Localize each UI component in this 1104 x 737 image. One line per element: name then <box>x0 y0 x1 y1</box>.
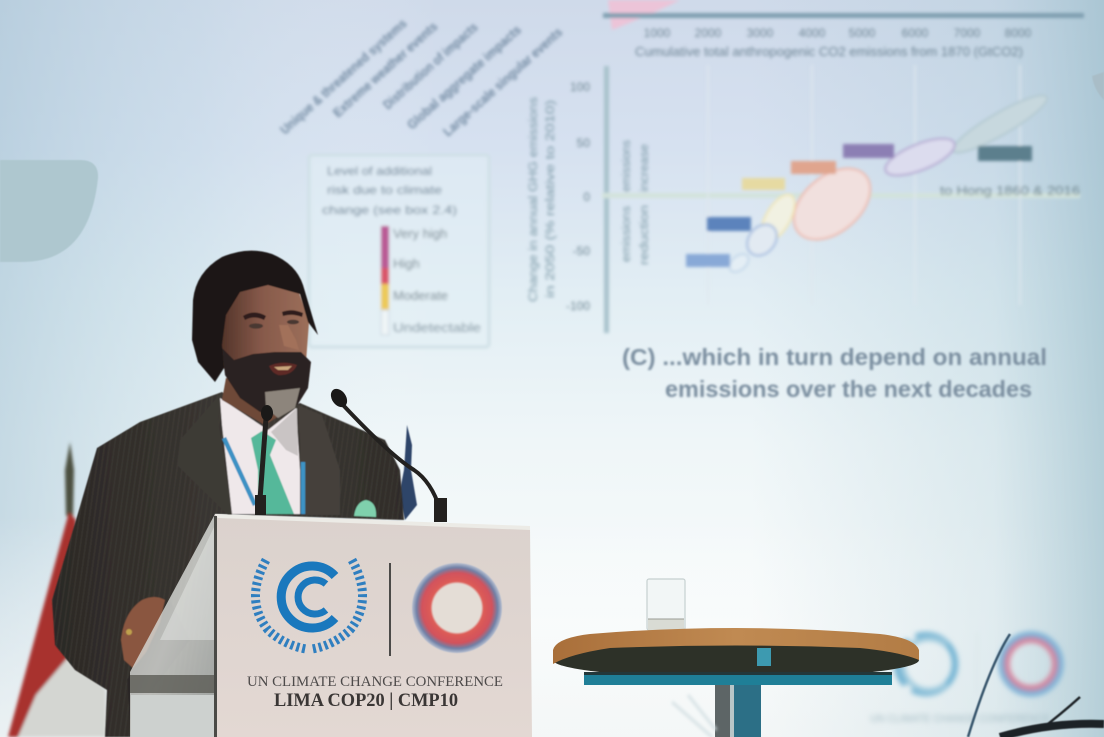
podium <box>130 514 532 737</box>
lanyard <box>224 438 303 514</box>
mouth <box>269 363 297 375</box>
slide chart C: emissions scatter: 100 <box>570 80 590 94</box>
UNFCCC logo <box>255 560 363 649</box>
nose <box>279 325 299 350</box>
slide: risk legend box: Moderate <box>393 288 448 303</box>
COP20 ring logo <box>412 563 502 653</box>
podium text: LIMA COP20 | CMP10 <box>274 690 458 711</box>
slide chart C: emissions scatter: Change in annual GHG emissions <box>528 97 540 302</box>
podium text: UN CLIMATE CHANGE CONFERENCE <box>247 674 503 690</box>
flag: Peru behind speaker <box>8 442 106 737</box>
bracket <box>584 672 892 685</box>
slide panel corner at left <box>0 160 98 262</box>
slide: risk legend box: risk due to climate <box>327 183 442 197</box>
drinking glass <box>647 579 685 630</box>
podium front <box>215 514 532 737</box>
slide chart A: top axis with captions: 3000 <box>747 26 774 40</box>
slide chart A: top axis with captions: 2000 <box>695 26 722 40</box>
slide: risk legend box: Level of additional <box>327 164 432 178</box>
speaker: Rajendra Pachauri <box>52 251 404 737</box>
blurred table-base shadow streaks <box>672 695 716 737</box>
slide: diagonal column labels: Large-scale singular events <box>440 24 565 139</box>
slide caption text: emissions over the next decades <box>665 376 1032 402</box>
slide: risk legend box: change (see box 2.4) <box>322 203 457 217</box>
slide: diagonal column labels: Global aggregate impacts <box>404 22 524 132</box>
slide chart C: emissions scatter: -50 <box>573 244 590 258</box>
left lapel <box>177 392 232 515</box>
blurred projected logo bottom right <box>870 632 1060 725</box>
slide chart C: emissions scatter: -100 <box>566 299 590 313</box>
eyes and brows <box>243 310 303 329</box>
slide: diagonal column labels <box>277 16 565 139</box>
pocket square <box>354 500 376 517</box>
slide: diagonal column labels: Distribution of impacts <box>380 19 481 112</box>
slide: risk legend box: Very high <box>393 226 447 241</box>
slide chart C: emissions scatter <box>528 65 1080 333</box>
slide chart A: top axis with captions: 6000 <box>902 26 929 40</box>
C letters <box>281 566 335 628</box>
hair <box>192 251 318 382</box>
podium glass side <box>130 514 215 737</box>
wreath <box>255 560 363 649</box>
slide caption text: (C) ...which in turn depend on annual <box>622 344 1047 370</box>
face <box>222 278 309 395</box>
slide: risk legend box: High <box>393 256 420 271</box>
slide: risk legend box <box>309 155 489 347</box>
shirt <box>220 398 300 514</box>
tie <box>251 431 294 514</box>
slide chart C: emissions scatter: to Hong 1860 & 2016 <box>940 183 1080 198</box>
sleeve below hand <box>127 600 190 720</box>
slide chart C: emissions scatter: reduction <box>639 205 651 265</box>
slide caption text <box>622 344 1047 402</box>
pedestal <box>715 680 761 737</box>
jacket <box>52 392 404 737</box>
slide chart A: top axis with captions: 4000 <box>799 26 826 40</box>
foreground plant streaks <box>968 634 1104 737</box>
table underside <box>553 642 919 678</box>
flag: distant pole with dark blue cloth <box>399 425 417 520</box>
neck <box>222 378 296 425</box>
slide chart A: top axis with captions: 7000 <box>954 26 981 40</box>
slide chart A: top axis with captions: 5000 <box>849 26 876 40</box>
slide chart C: emissions scatter: emissions <box>621 206 633 262</box>
slide chart C: emissions scatter: emissions <box>621 140 633 192</box>
slide chart C: emissions scatter: increase <box>639 144 651 192</box>
blurred projected logo bottom right: UN CLIMATE CHANGE CONFERENCE <box>870 713 1050 725</box>
hand with ring <box>121 597 165 668</box>
table with glass <box>553 579 919 737</box>
slide: diagonal column labels: Extreme weather events <box>330 19 440 120</box>
logo divider <box>389 563 391 656</box>
slide chart A: top axis with captions: 1000 <box>644 26 671 40</box>
beard <box>222 348 311 416</box>
slide chart A: top axis with captions <box>603 0 1084 59</box>
slide chart C: emissions scatter: 0 <box>583 190 590 204</box>
table top <box>553 628 919 664</box>
slide: risk legend box: Undetectable <box>393 321 481 335</box>
top right screen fixture <box>1092 72 1104 100</box>
microphone: left <box>255 405 273 515</box>
slide chart A: top axis with captions: Cumulative total anthropogenic CO2 emissions from 1870 (GtCO2) <box>635 45 1023 59</box>
slide chart C: emissions scatter: in 2050 (% relative to 2010) <box>545 100 557 298</box>
slide chart A: top axis with captions: 8000 <box>1005 26 1032 40</box>
slide: diagonal column labels: Unique & threatened systems <box>277 16 410 137</box>
microphone: right <box>328 386 447 522</box>
slide chart C: emissions scatter: 50 <box>577 136 590 150</box>
right lapel <box>298 405 340 515</box>
podium text <box>247 674 503 711</box>
